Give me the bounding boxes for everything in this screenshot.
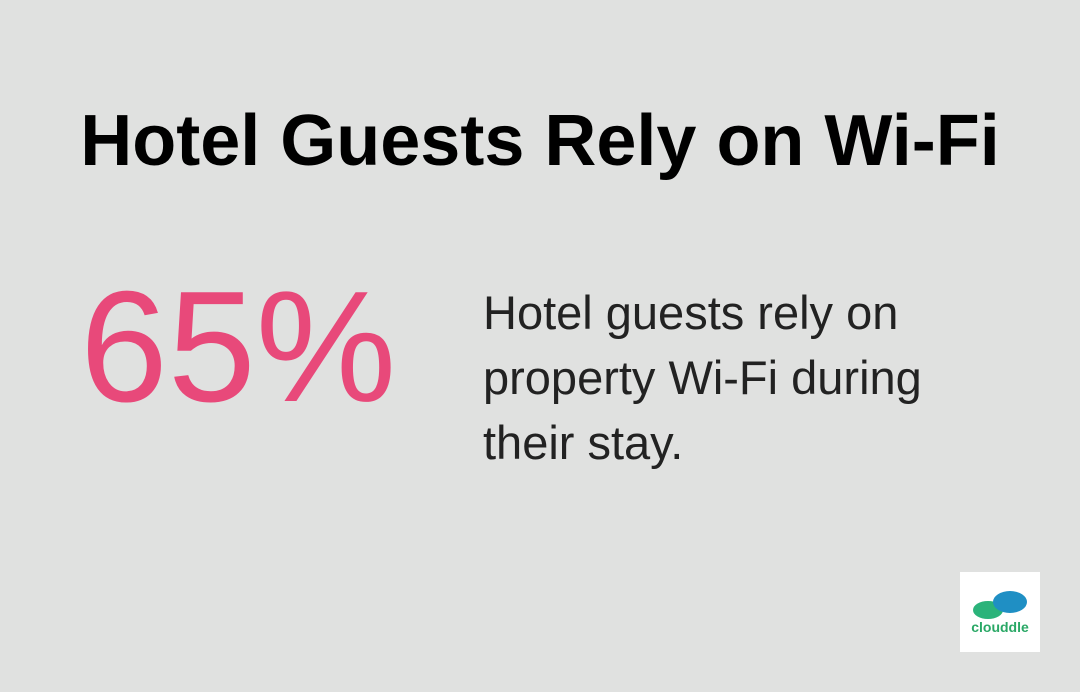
stat description: Hotel guests rely on <box>483 286 898 339</box>
logo: clouddle: clouddle <box>971 619 1029 635</box>
stat description <box>483 286 922 469</box>
stat description: their stay. <box>483 416 683 469</box>
logo: clouddle <box>960 572 1040 652</box>
stat description: property Wi-Fi during <box>483 351 922 404</box>
stat number: 65% <box>80 259 396 435</box>
title: Hotel Guests Rely on Wi-Fi <box>80 101 1000 181</box>
